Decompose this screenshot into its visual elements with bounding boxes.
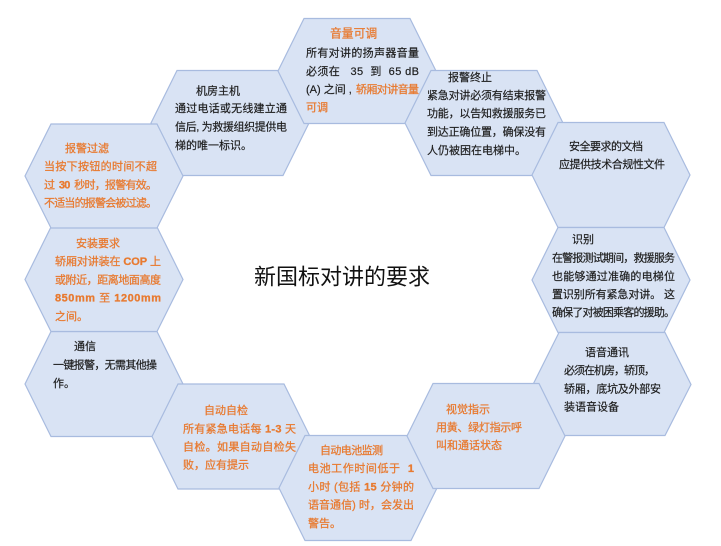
heading: 语音通讯: 语音通讯 [585,345,629,359]
text block: 语音通讯: 装语音设备 [564,400,619,414]
text block: 安装要求 [55,254,161,323]
text block: 识别: 置识别所有紧急对讲。 这 [552,287,675,301]
heading: 报警终止: 报警终止 [448,70,492,84]
text block: 自动电池监测: 电池工作时间低于 1 [308,462,414,475]
text block: 自动自检: 败，应有提示 [183,458,249,472]
heading: 音量可调: 音量可调 [330,26,377,40]
text block: 音量可调: 所有对讲的扬声器音量 [306,46,419,60]
heading: 识别: 识别 [572,233,594,246]
text block: 报警终止: 紧急对讲必须有结束报警 [427,88,546,102]
text block: 报警终止: 功能，以告知救援服务已 [427,106,546,120]
text block: 报警终止: 人仍被困在电梯中。 [427,144,526,157]
text block: 音量可调: 轿厢对讲音量 [356,82,419,96]
text block: 自动自检: 所有紧急电话每 1-3 天 [183,422,296,436]
text block: 自动电池监测: 小时 (包括 15 分钟的 [308,480,414,494]
text block: 安装要求: 之间。 [55,309,88,323]
text block: 报警终止 [427,88,546,157]
heading: 通信: 通信 [74,340,96,353]
text block: 安全要求的文档: 应提供技术合规性文件 [559,157,665,171]
text block: 通信: 一键报警，无需其他操 [53,358,157,372]
hexagon: 报警过滤 [25,124,183,228]
text block: 报警终止: 到达正确位置，确保没有 [427,124,546,138]
text block: 自动自检 [183,422,296,472]
hexagon: 自动自检 [152,384,310,489]
heading: 安全要求的文档: 安全要求的文档 [569,139,643,153]
text block: 识别: 在警报测试期间，救援服务 [552,250,675,264]
text block: 机房主机: 信后, 为救援组织提供电 [175,120,287,134]
hexagon: 安全要求的文档 [532,122,690,228]
text block: 机房主机: 梯的唯一标识。 [175,138,252,152]
heading: 安装要求: 安装要求 [76,236,120,250]
text block: 语音通讯: 轿厢，底坑及外部安 [564,382,661,396]
text block: 机房主机 [175,101,287,152]
heading: 视觉指示: 视觉指示 [446,402,490,416]
heading: 报警过滤: 报警过滤 [65,141,109,155]
hexagon: 视觉指示 [407,384,565,488]
text block: 识别: 也能够通过准确的电梯位 [552,269,675,283]
text block: 识别: 确保了对被困乘客的援助。 [552,305,675,319]
hexagon: 安装要求 [25,227,183,332]
text block: 自动电池监测: 语音通信) 时，会发出 [308,498,414,512]
text block: 自动电池监测 [308,462,414,530]
text block: 语音通讯 [564,363,661,414]
hexagon: 自动电池监测 [279,436,437,540]
text block: 安装要求: 850mm 至 1200mm [55,292,161,304]
text block: 视觉指示 [436,420,522,452]
text block: 报警过滤 [44,159,157,210]
heading: 自动自检: 自动自检 [204,403,248,417]
text block: 音量可调 [306,46,419,114]
title: 新国标对讲的要求 [254,264,430,290]
heading: 自动电池监测: 自动电池监测 [320,444,383,457]
hexagon: 报警终止 [405,70,563,176]
text block: 机房主机: 通过电话或无线建立通 [175,101,287,115]
text block: 通信 [53,358,157,390]
text block: 报警过滤: 不适当的报警会被过滤。 [44,196,157,210]
text block: 音量可调: (A) 之间 , [306,82,352,96]
text block: 音量可调: 可调 [306,101,328,114]
hexagon: 音量可调 [278,18,436,124]
hexagon: 识别 [532,228,690,332]
hexagon: 通信 [25,332,183,436]
text block: 通信: 作。 [53,377,75,390]
text block: 视觉指示: 叫和通话状态 [436,438,502,452]
text block: 语音通讯: 必须在机房，轿顶， [564,363,655,377]
hexagon: 机房主机 [151,70,309,176]
text block: 安装要求: 或附近，距离地面高度 [55,272,161,286]
hexagon: 语音通讯 [533,332,691,436]
text block: 识别 [552,250,675,319]
text block: 视觉指示: 用黄、绿灯指示呼 [436,420,522,434]
heading: 机房主机: 机房主机 [196,84,240,98]
text block: 自动电池监测: 警告。 [308,516,341,530]
text block: 自动自检: 自检。如果自动自检失 [183,440,296,454]
text block: 安装要求: 轿厢对讲装在 COP 上 [55,254,161,268]
text block: 报警过滤: 当按下按钮的时间不超 [44,159,157,173]
text block: 报警过滤: 过 30 秒时，报警有效。 [44,178,157,192]
text block: 音量可调: 必须在 35 到 65 dB [306,65,419,78]
